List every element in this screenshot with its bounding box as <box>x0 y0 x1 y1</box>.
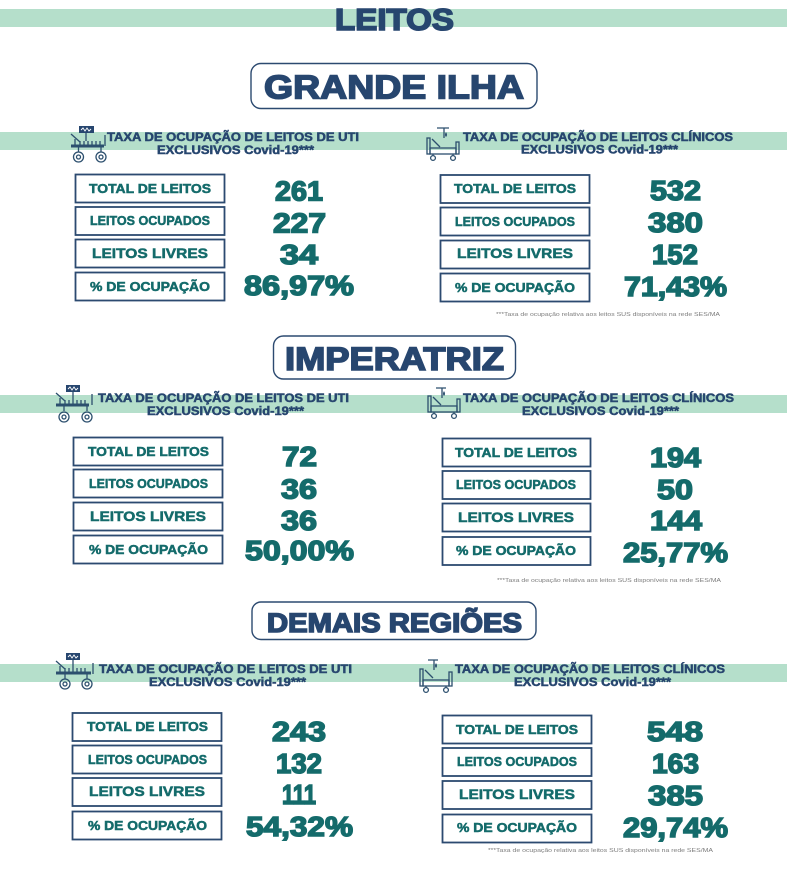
panel heading: clinical occupancy: EXCLUSIVOS Covid-19*** <box>514 677 672 689</box>
title band: LEITOS <box>0 3 787 37</box>
header band <box>0 132 787 150</box>
data table: UTI beds: LEITOS LIVRES <box>89 783 205 799</box>
data table: UTI beds: 72 <box>282 441 317 472</box>
data table: UTI beds: LEITOS OCUPADOS <box>90 214 210 228</box>
heading: Imperatriz <box>274 336 516 379</box>
footnote: ***Taxa de ocupação relativa aos leitos SUS disponíveis na rede SES/MA <box>488 848 713 854</box>
data table: clinical beds: LEITOS LIVRES <box>458 509 574 525</box>
title band: LEITOS: LEITOS <box>335 3 454 37</box>
data table: clinical beds <box>440 175 727 302</box>
panel heading: UTI occupancy <box>99 663 352 689</box>
section: Demais Regiões <box>0 602 787 854</box>
header band <box>0 395 787 413</box>
section: Imperatriz <box>0 336 787 584</box>
panel heading: UTI occupancy: EXCLUSIVOS Covid-19*** <box>147 406 305 418</box>
icon: clinical bed <box>427 128 459 160</box>
heading: Demais Regiões: DEMAIS REGIÕES <box>267 608 522 638</box>
data table: clinical beds: LEITOS LIVRES <box>457 245 573 261</box>
data table: UTI beds: 34 <box>280 239 319 270</box>
panel heading: clinical occupancy <box>455 663 725 689</box>
data table: UTI beds: 86,97% <box>244 270 354 301</box>
data table: UTI beds: 243 <box>272 716 326 747</box>
data table: clinical beds: TOTAL DE LEITOS <box>454 182 576 196</box>
data table: clinical beds: 144 <box>650 505 702 536</box>
data table: UTI beds: LEITOS OCUPADOS <box>89 477 208 491</box>
data table: clinical beds <box>442 438 728 568</box>
footnote: ***Taxa de ocupação relativa aos leitos SUS disponíveis na rede SES/MA <box>496 312 720 318</box>
data table: UTI beds: % DE OCUPAÇÃO <box>90 279 210 294</box>
footnote: ***Taxa de ocupação relativa aos leitos SUS disponíveis na rede SES/MA <box>497 578 721 584</box>
data table: clinical beds: LEITOS OCUPADOS <box>457 755 577 769</box>
data table: UTI beds: 132 <box>276 748 322 779</box>
data table: clinical beds: 380 <box>648 207 703 238</box>
data table: UTI beds: LEITOS LIVRES <box>90 508 206 524</box>
icon: clinical bed <box>420 660 452 692</box>
data table: UTI beds: 54,32% <box>246 811 353 842</box>
header band <box>0 664 787 682</box>
panel heading: clinical occupancy: TAXA DE OCUPAÇÃO DE LEITOS CLÍNICOS <box>463 131 733 144</box>
panel heading: clinical occupancy: EXCLUSIVOS Covid-19*** <box>522 406 680 418</box>
data table: UTI beds: LEITOS OCUPADOS <box>88 753 207 767</box>
data table: clinical beds: % DE OCUPAÇÃO <box>455 280 575 295</box>
data table: clinical beds: 548 <box>647 716 703 747</box>
data table: UTI beds: 111 <box>282 779 316 810</box>
data table: clinical beds: 385 <box>648 780 703 811</box>
data table: clinical beds: % DE OCUPAÇÃO <box>457 820 577 835</box>
panel heading: UTI occupancy: EXCLUSIVOS Covid-19*** <box>149 677 307 689</box>
heading: Imperatriz: IMPERATRIZ <box>285 341 504 377</box>
data table: clinical beds: LEITOS LIVRES <box>459 786 575 802</box>
data table: clinical beds: TOTAL DE LEITOS <box>455 446 577 460</box>
panel heading: clinical occupancy: TAXA DE OCUPAÇÃO DE LEITOS CLÍNICOS <box>455 663 725 676</box>
panel heading: clinical occupancy: TAXA DE OCUPAÇÃO DE LEITOS CLÍNICOS <box>463 392 734 405</box>
icon: ICU bed <box>56 653 93 689</box>
data table: clinical beds: 71,43% <box>624 271 727 302</box>
panel heading: UTI occupancy: TAXA DE OCUPAÇÃO DE LEITOS DE UTI <box>107 131 359 144</box>
heading: Grande Ilha: GRANDE ILHA <box>264 68 524 106</box>
data table: clinical beds: LEITOS OCUPADOS <box>456 478 576 492</box>
data table: clinical beds: 194 <box>650 442 701 473</box>
panel heading: clinical occupancy <box>463 131 733 156</box>
data table: clinical beds <box>442 716 728 843</box>
data table: UTI beds: 227 <box>273 208 326 238</box>
heading: Grande Ilha <box>251 64 537 108</box>
icon: ICU bed <box>71 126 106 162</box>
icon: ICU bed <box>56 385 92 422</box>
data table: clinical beds: 50 <box>657 474 693 505</box>
icon: clinical bed <box>428 388 460 418</box>
data table: clinical beds: 25,77% <box>623 537 728 568</box>
data table: UTI beds: TOTAL DE LEITOS <box>87 720 208 734</box>
section: Grande Ilha <box>0 64 787 318</box>
panel heading: UTI occupancy <box>107 131 359 157</box>
data table: UTI beds <box>72 713 353 842</box>
data table: clinical beds: 152 <box>652 239 698 270</box>
data table: clinical beds: 29,74% <box>623 812 728 843</box>
data table: clinical beds: TOTAL DE LEITOS <box>456 723 578 737</box>
data table: UTI beds: % DE OCUPAÇÃO <box>88 818 207 833</box>
panel heading: UTI occupancy: TAXA DE OCUPAÇÃO DE LEITOS DE UTI <box>99 663 352 676</box>
data table: UTI beds: TOTAL DE LEITOS <box>89 182 211 196</box>
data table: UTI beds: 261 <box>275 176 323 206</box>
data table: UTI beds: TOTAL DE LEITOS <box>88 445 209 459</box>
panel heading: UTI occupancy <box>98 392 349 418</box>
data table: UTI beds: 50,00% <box>245 535 354 566</box>
panel heading: UTI occupancy: TAXA DE OCUPAÇÃO DE LEITOS DE UTI <box>98 392 349 405</box>
panel heading: clinical occupancy <box>463 392 734 418</box>
panel heading: clinical occupancy: EXCLUSIVOS Covid-19*** <box>521 144 679 156</box>
data table: clinical beds: 532 <box>650 175 701 206</box>
data table: UTI beds: 36 <box>281 505 317 536</box>
data table: UTI beds: % DE OCUPAÇÃO <box>89 542 208 557</box>
heading: Demais Regiões <box>252 602 536 640</box>
data table: UTI beds <box>74 438 354 566</box>
data table: clinical beds: LEITOS OCUPADOS <box>455 215 575 229</box>
data table: UTI beds <box>76 174 354 301</box>
data table: UTI beds: 36 <box>281 474 317 504</box>
data table: UTI beds: LEITOS LIVRES <box>92 245 208 261</box>
data table: clinical beds: % DE OCUPAÇÃO <box>456 543 576 558</box>
data table: clinical beds: 163 <box>652 748 699 779</box>
panel heading: UTI occupancy: EXCLUSIVOS Covid-19*** <box>157 145 315 157</box>
